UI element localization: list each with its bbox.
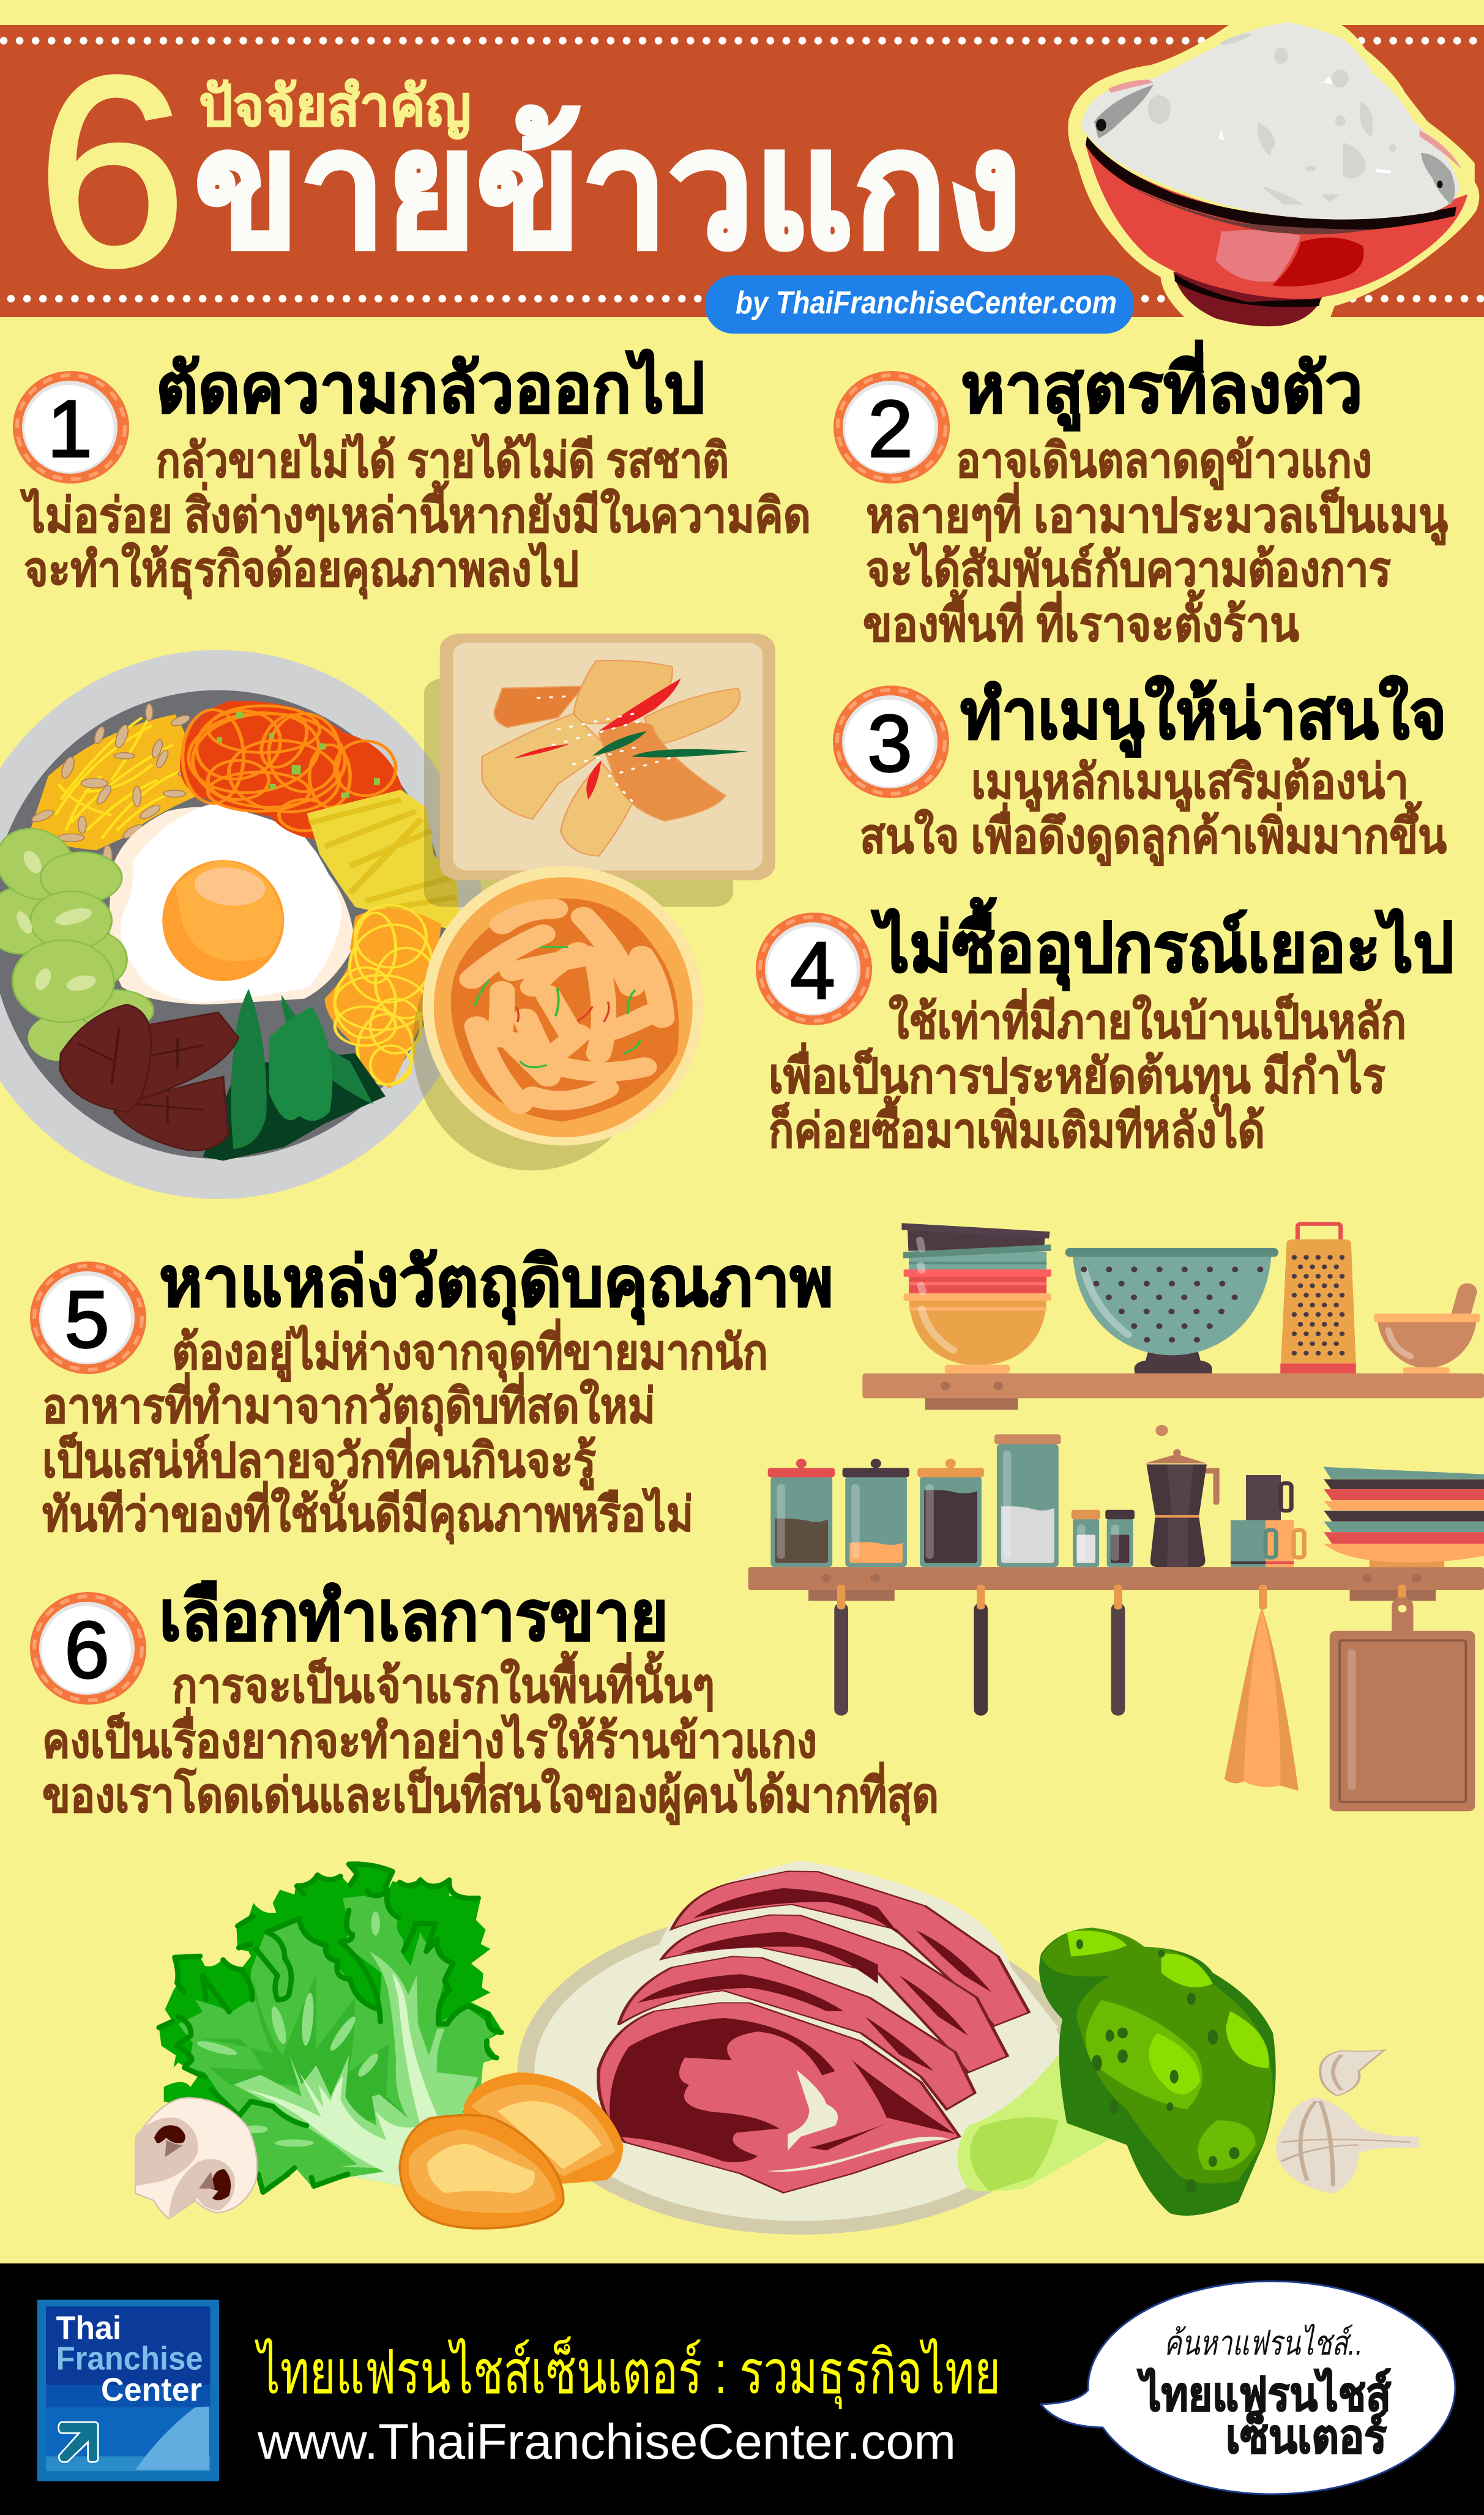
cucumber slices bbox=[0, 820, 153, 1061]
illustration: lettuce, mushroom and bread bbox=[135, 1864, 623, 2229]
broccoli bbox=[957, 1928, 1276, 2216]
heading 2: หาสูตรที่ลงตัว bbox=[961, 340, 1363, 431]
icon: bowl of rice bbox=[1068, 21, 1479, 327]
panel: tip 4 bbox=[756, 897, 1454, 1157]
badge 3 bbox=[833, 686, 949, 798]
heading 4: ไม่ซื้ออุปกรณ์เยอะไป bbox=[871, 897, 1454, 991]
spinach bbox=[203, 989, 386, 1160]
lettuce bbox=[159, 1864, 502, 2192]
stack of plates bbox=[1324, 1467, 1484, 1567]
bread rolls bbox=[400, 2072, 623, 2229]
side shadows bbox=[412, 678, 733, 1170]
logo bbox=[37, 2300, 219, 2481]
footer band bbox=[0, 2263, 1484, 2515]
spicy carrot bbox=[177, 699, 403, 840]
logo: Thai bbox=[56, 2311, 121, 2347]
body 5: เป็นเสน่ห์ปลายจวักที่คนกินจะรู้ bbox=[42, 1427, 596, 1490]
badge 1: 1 bbox=[47, 384, 92, 474]
title number 6: 6 bbox=[37, 21, 187, 322]
speech bubble bbox=[1041, 2281, 1455, 2494]
logo: Center bbox=[101, 2372, 202, 2408]
colander bbox=[1065, 1248, 1278, 1373]
garlic bbox=[1276, 2050, 1419, 2194]
subtitle: ปัจจัยสำคัญ bbox=[199, 75, 471, 140]
body 6 bbox=[42, 1651, 939, 1825]
panel: tip 5 bbox=[30, 1244, 833, 1544]
badge 1 bbox=[13, 371, 129, 484]
body 2 bbox=[863, 433, 1448, 651]
panel: tip 3 bbox=[833, 676, 1447, 866]
mushroom bbox=[135, 2098, 257, 2219]
body 1: จะทำให้ธุรกิจด้อยคุณภาพลงไป bbox=[24, 542, 579, 599]
body 2: จะได้สัมพันธ์กับความต้องการ bbox=[866, 542, 1391, 596]
moka pot bbox=[1144, 1425, 1217, 1567]
body 4: ใช้เท่าที่มีภายในบ้านเป็นหลัก bbox=[889, 988, 1406, 1048]
heading 3: ทำเมนูให้น่าสนใจ bbox=[960, 676, 1447, 757]
illustration: meat, broccoli and garlic bbox=[517, 1861, 1419, 2235]
pickled radish bbox=[307, 790, 459, 929]
header band bbox=[0, 25, 1484, 317]
body 2: ของพื้นที่ ที่เราจะตั้งร้าน bbox=[863, 589, 1299, 651]
body 4: เพื่อเป็นการประหยัดต้นทุน มีกำไร bbox=[769, 1042, 1385, 1106]
main title: ขายข้าวแกง bbox=[194, 98, 1022, 282]
body 6: คงเป็นเรื่องยากจะทำอย่างไรให้ร้านข้าวแกง bbox=[42, 1707, 817, 1768]
body 4: ก็ค่อยซื้อมาเพิ่มเติมทีหลังได้ bbox=[769, 1096, 1265, 1157]
badge 4: 4 bbox=[790, 925, 835, 1015]
footer url: www.ThaiFranchiseCenter.com bbox=[257, 2414, 956, 2470]
jars bbox=[768, 1434, 1135, 1567]
bubble name: ไทยแฟรนไชส์ bbox=[1137, 2367, 1392, 2421]
grater bbox=[1280, 1224, 1356, 1373]
body 5: ทันทีว่าของที่ใช้นั้นดีมีคุณภาพหรือไม่ bbox=[42, 1479, 693, 1544]
meat platter bbox=[517, 1861, 1084, 2235]
body 1 bbox=[20, 433, 811, 599]
source pill bbox=[705, 275, 1134, 334]
tray of radish kimchi bbox=[440, 633, 775, 880]
logo: Franchise bbox=[56, 2341, 203, 2377]
badge 5: 5 bbox=[64, 1274, 110, 1364]
top shelf bbox=[862, 1373, 1484, 1410]
hanging towel bbox=[1225, 1585, 1299, 1791]
cutting board bbox=[1330, 1585, 1475, 1811]
body 2: อาจเดินตลาดดูข้าวแกง bbox=[956, 433, 1372, 490]
badge 6 bbox=[30, 1592, 146, 1705]
badge 4 bbox=[756, 913, 872, 1025]
heading 5: หาแหล่งวัตถุดิบคุณภาพ bbox=[159, 1244, 833, 1325]
yellow noodles bbox=[325, 905, 441, 1088]
body 3 bbox=[860, 755, 1447, 866]
illustration: kitchen shelves bbox=[748, 1223, 1484, 1811]
body 5: อาหารที่ทำมาจากวัตถุดิบที่สดใหม่ bbox=[42, 1372, 655, 1436]
pill text: by ThaiFranchiseCenter.com bbox=[736, 285, 1117, 321]
bubble name line 2: เซ็นเตอร์ bbox=[1226, 2408, 1387, 2463]
shiitake mushrooms bbox=[60, 1004, 239, 1151]
stacked bowls bbox=[901, 1223, 1051, 1373]
hanging utensils bbox=[834, 1585, 1125, 1716]
panel: tip 1 bbox=[13, 349, 811, 599]
badge 5 bbox=[30, 1261, 146, 1374]
egg yolk bbox=[162, 860, 284, 981]
badge 3: 3 bbox=[867, 698, 912, 788]
body 6: ของเราโดดเด่นและเป็นที่สนใจของผู้คนได้มากที่สุด bbox=[42, 1762, 939, 1825]
body 1: กลัวขายไม่ได้ รายได้ไม่ดี รสชาติ bbox=[156, 433, 729, 487]
body 5 bbox=[42, 1318, 768, 1544]
body 4 bbox=[769, 988, 1406, 1157]
body 1: ไม่อร่อย สิ่งต่างๆเหล่านี้หากยังมีในความคิด bbox=[20, 480, 811, 542]
icon: arrow bbox=[59, 2422, 98, 2462]
panel: tip 6 bbox=[30, 1578, 939, 1825]
badge 2: 2 bbox=[868, 384, 913, 474]
meat slices bbox=[598, 1871, 1029, 2193]
lower shelf bbox=[748, 1567, 1484, 1601]
heading 6: เลือกทำเลการขาย bbox=[159, 1578, 668, 1654]
body 3: เมนูหลักเมนูเสริมต้องน่า bbox=[971, 755, 1409, 812]
bibimbap bowl bbox=[0, 650, 483, 1199]
badge 6: 6 bbox=[64, 1605, 110, 1695]
bubble script text: ค้นหาแฟรนไชส์.. bbox=[1164, 2323, 1363, 2362]
bowl of tteokbokki bbox=[423, 866, 704, 1146]
heading 1: ตัดความกลัวออกไป bbox=[156, 349, 705, 427]
egg white bbox=[110, 807, 355, 1004]
badge 2 bbox=[833, 371, 950, 484]
illustration: bibimbap bowl and side dishes bbox=[0, 633, 775, 1199]
mortar and pestle bbox=[1374, 1291, 1480, 1373]
mugs bbox=[1231, 1475, 1304, 1567]
footer tagline: ไทยแฟรนไชส์เซ็นเตอร์ : รวมธุรกิจไทย bbox=[255, 2336, 1001, 2410]
body 5: ต้องอยู่ไม่ห่างจากจุดที่ขายมากนัก bbox=[172, 1318, 768, 1382]
panel: tip 2 bbox=[833, 340, 1448, 651]
bean sprouts bbox=[29, 704, 203, 867]
body 6: การจะเป็นเจ้าแรกในพื้นที่นั้นๆ bbox=[172, 1651, 715, 1713]
